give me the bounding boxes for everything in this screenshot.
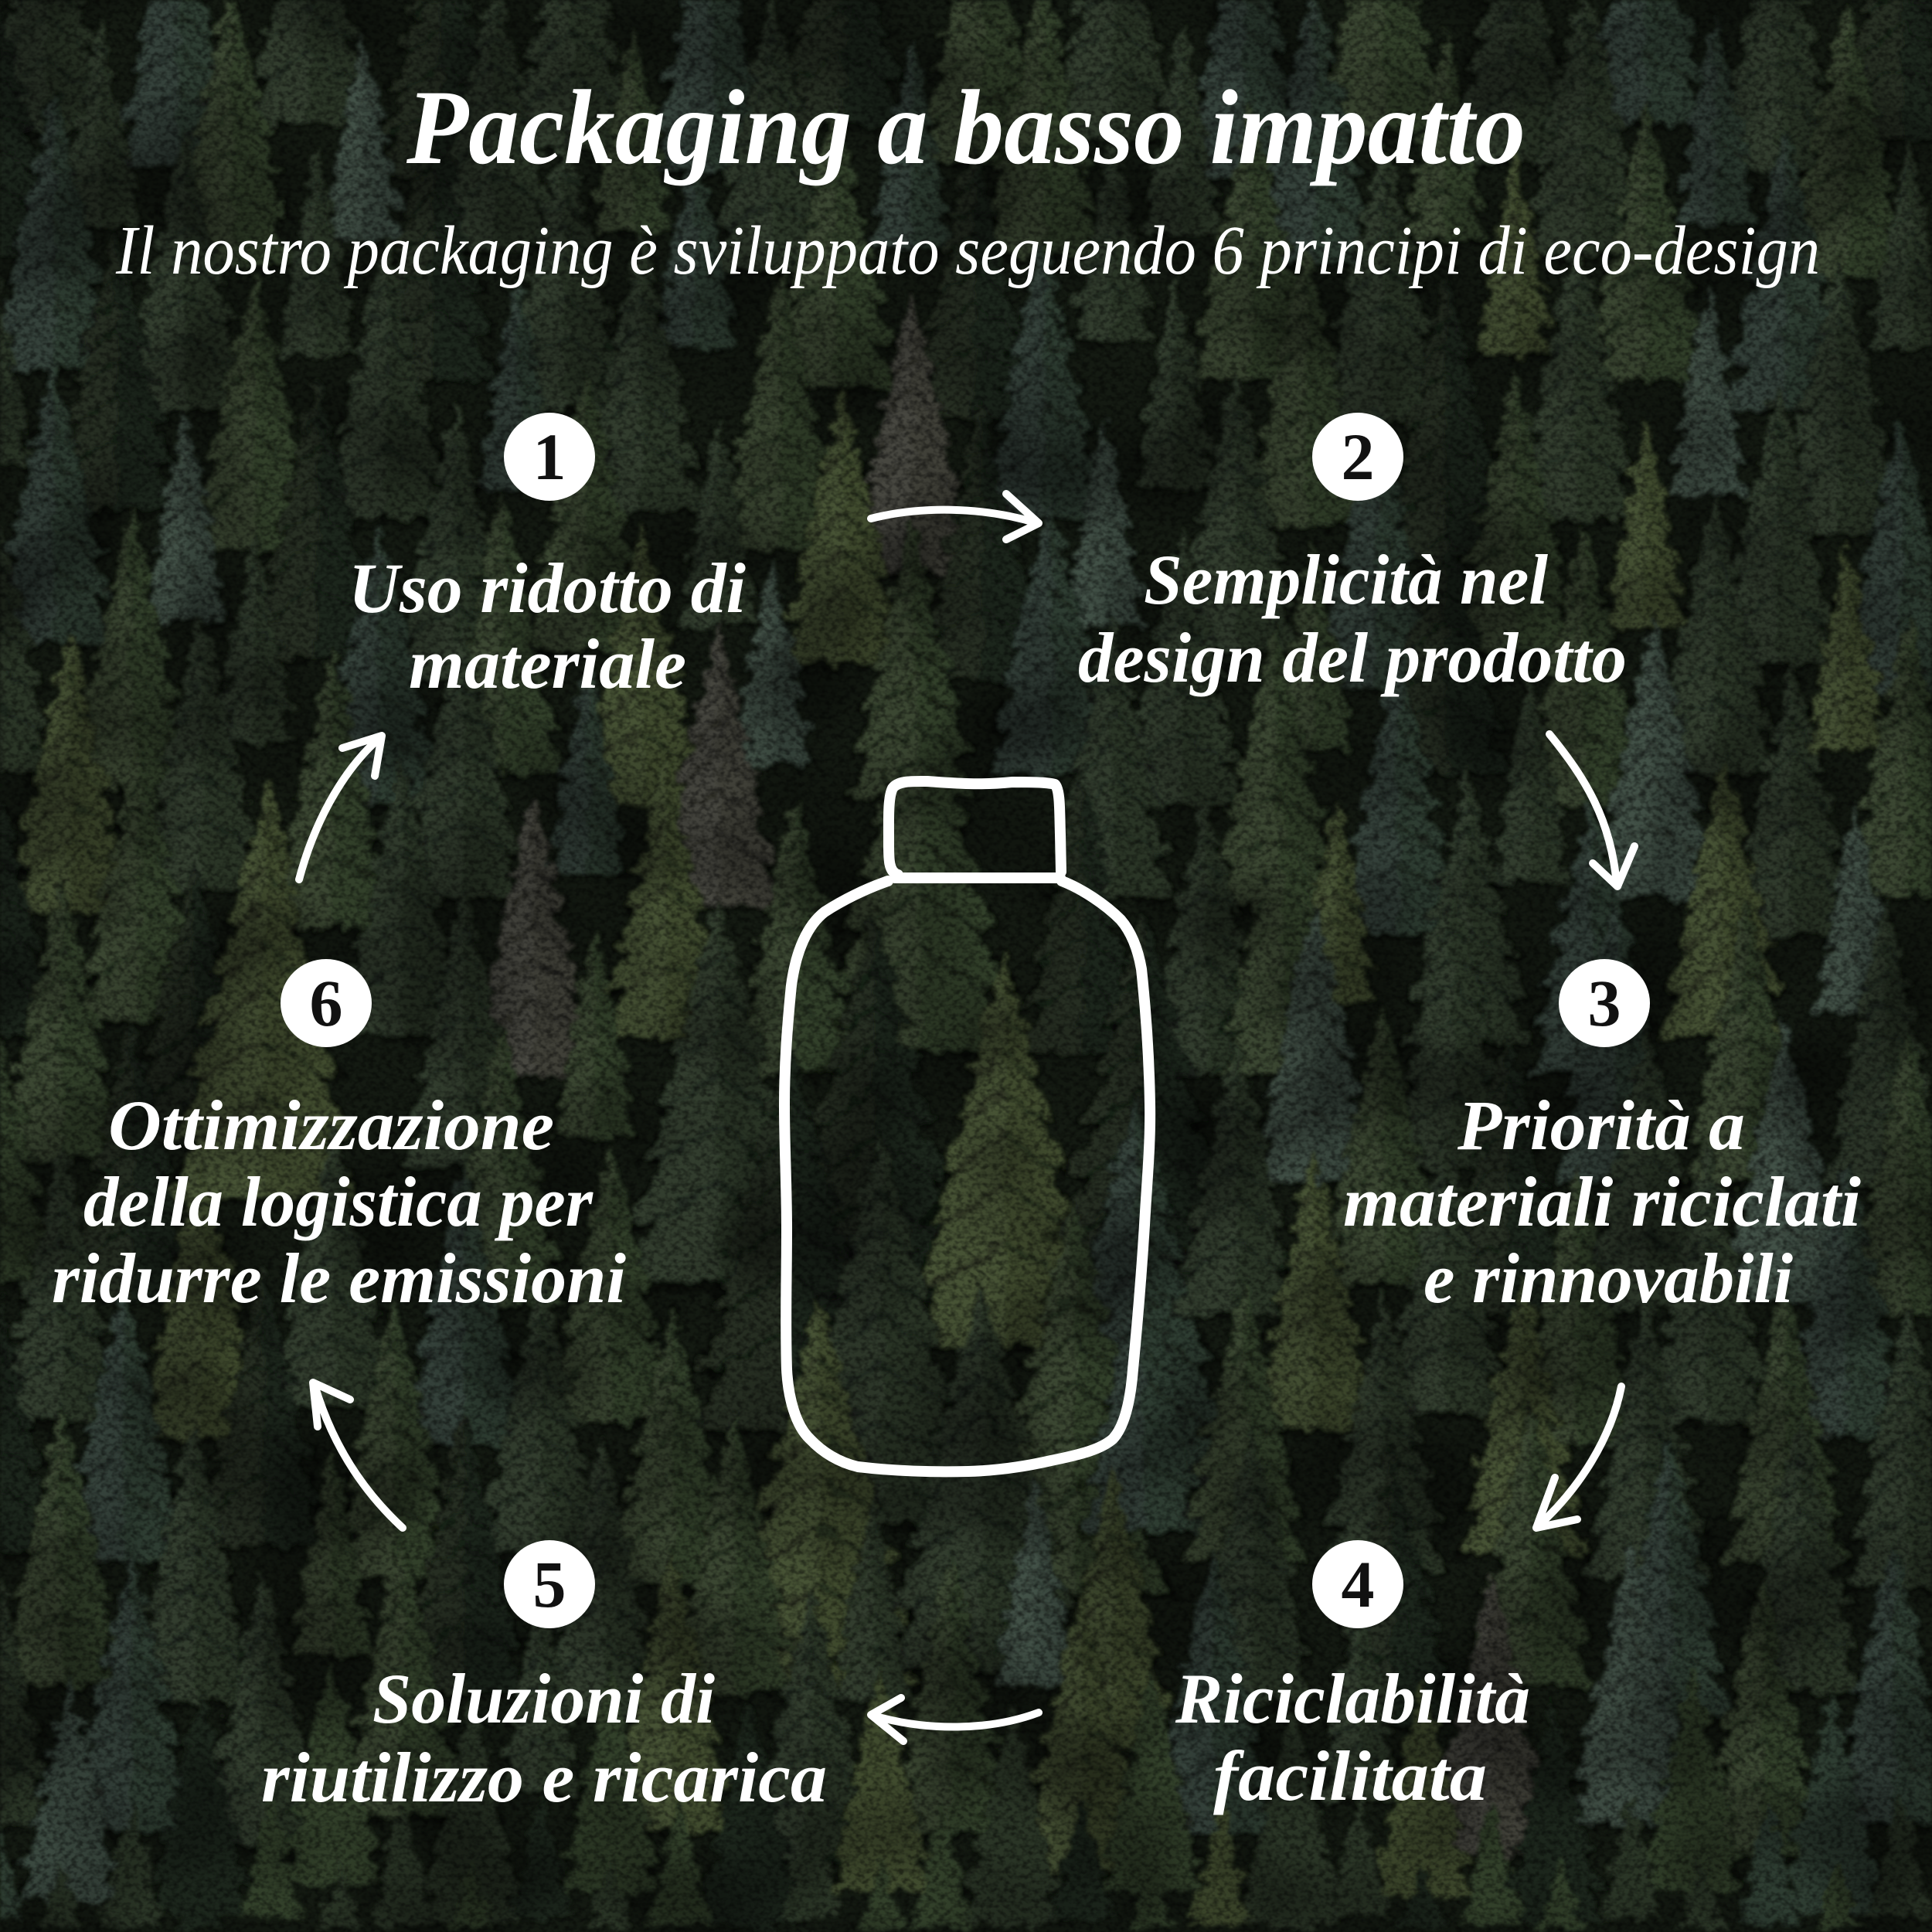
- label 5: riutilizzo e ricarica: [261, 1738, 827, 1817]
- arrow: step 2 to 3: [1549, 734, 1634, 886]
- number badge 5: [504, 1540, 595, 1628]
- number badge 1: 1: [533, 420, 566, 494]
- bottle body: [784, 878, 1150, 1471]
- arrow: step 3 to 4: [1536, 1386, 1621, 1528]
- label 1: Uso ridotto di: [349, 549, 746, 628]
- label 5: Soluzioni di: [372, 1659, 715, 1738]
- number badge 6: [281, 959, 372, 1047]
- label 4: Riciclabilità: [1175, 1659, 1530, 1738]
- number badge 3: [1559, 959, 1650, 1047]
- step 4: recyclability: [1175, 1540, 1530, 1815]
- number badge 6: 6: [309, 966, 343, 1040]
- number badge 2: [1312, 413, 1403, 501]
- label 6: Ottimizzazione: [108, 1086, 554, 1165]
- label 6: ridurre le emissioni: [52, 1239, 626, 1318]
- arrow: step 5 to 6: [313, 1383, 403, 1528]
- step 2: design simplicity: [1078, 413, 1627, 697]
- label 2: design del prodotto: [1078, 618, 1627, 697]
- arrow: step 1 to 2: [871, 494, 1039, 539]
- arrow: step 4 to 5: [871, 1698, 1039, 1741]
- label 3: e rinnovabili: [1423, 1239, 1793, 1318]
- label 3: Priorità a: [1457, 1086, 1745, 1165]
- number badge 4: [1312, 1540, 1403, 1628]
- arrow: step 6 to 1: [299, 736, 382, 879]
- icon: hand-drawn bottle outline: [784, 781, 1150, 1471]
- number badge 2: 2: [1342, 420, 1374, 494]
- step 1: reduced material: [349, 413, 746, 703]
- label 1: materiale: [409, 624, 686, 703]
- number badge 4: 4: [1342, 1547, 1374, 1621]
- number badge 5: 5: [533, 1547, 566, 1621]
- label 4: facilitata: [1213, 1736, 1487, 1815]
- subtitle: Il nostro packaging è sviluppato seguendo 6 principi di eco-design: [115, 213, 1820, 289]
- label 2: Semplicità nel: [1144, 540, 1548, 619]
- label 3: materiali riciclati: [1343, 1162, 1861, 1241]
- bottle cap: [889, 781, 1061, 875]
- label 6: della logistica per: [83, 1162, 594, 1241]
- number badge 1: [504, 413, 595, 501]
- step 6: logistics optimisation: [52, 959, 626, 1318]
- title: Packaging a basso impatto: [406, 68, 1526, 186]
- step 5: reuse and refill: [261, 1540, 827, 1817]
- number badge 3: 3: [1587, 966, 1621, 1040]
- step 3: recycled materials: [1343, 959, 1861, 1318]
